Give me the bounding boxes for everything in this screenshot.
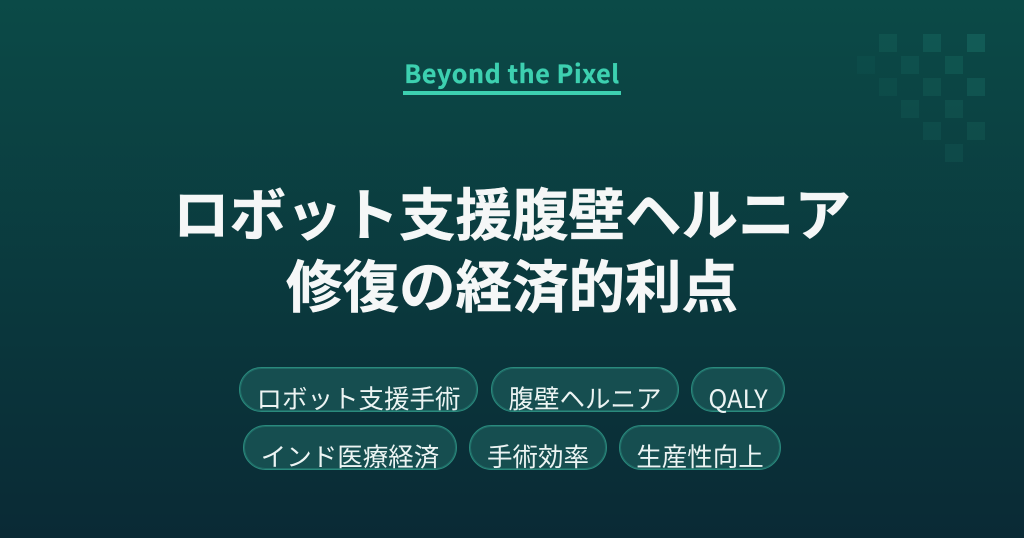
brand underline xyxy=(403,91,621,95)
tag: 腹壁ヘルニア: 腹壁ヘルニア xyxy=(508,379,662,416)
tag: ロボット支援手術 xyxy=(239,367,478,412)
tag: ロボット支援手術: ロボット支援手術 xyxy=(256,379,460,416)
title: ロボット支援腹壁ヘルニア xyxy=(173,170,851,252)
tag: QALY: QALY xyxy=(708,379,768,416)
tag: インド医療経済: インド医療経済 xyxy=(261,437,439,474)
brand label: Beyond the Pixel: Beyond the Pixel xyxy=(404,55,620,91)
decorative square pattern xyxy=(879,34,985,162)
tag: 手術効率: 手術効率 xyxy=(487,437,589,474)
tag: 腹壁ヘルニア xyxy=(491,367,679,412)
title: 修復の経済的利点 xyxy=(286,242,738,324)
tag: 生産性向上: 生産性向上 xyxy=(636,437,764,474)
tag: QALY xyxy=(691,367,785,412)
title xyxy=(173,170,851,324)
tag: 生産性向上 xyxy=(619,425,781,470)
tag: 手術効率 xyxy=(469,425,607,470)
tag: インド医療経済 xyxy=(243,425,457,470)
